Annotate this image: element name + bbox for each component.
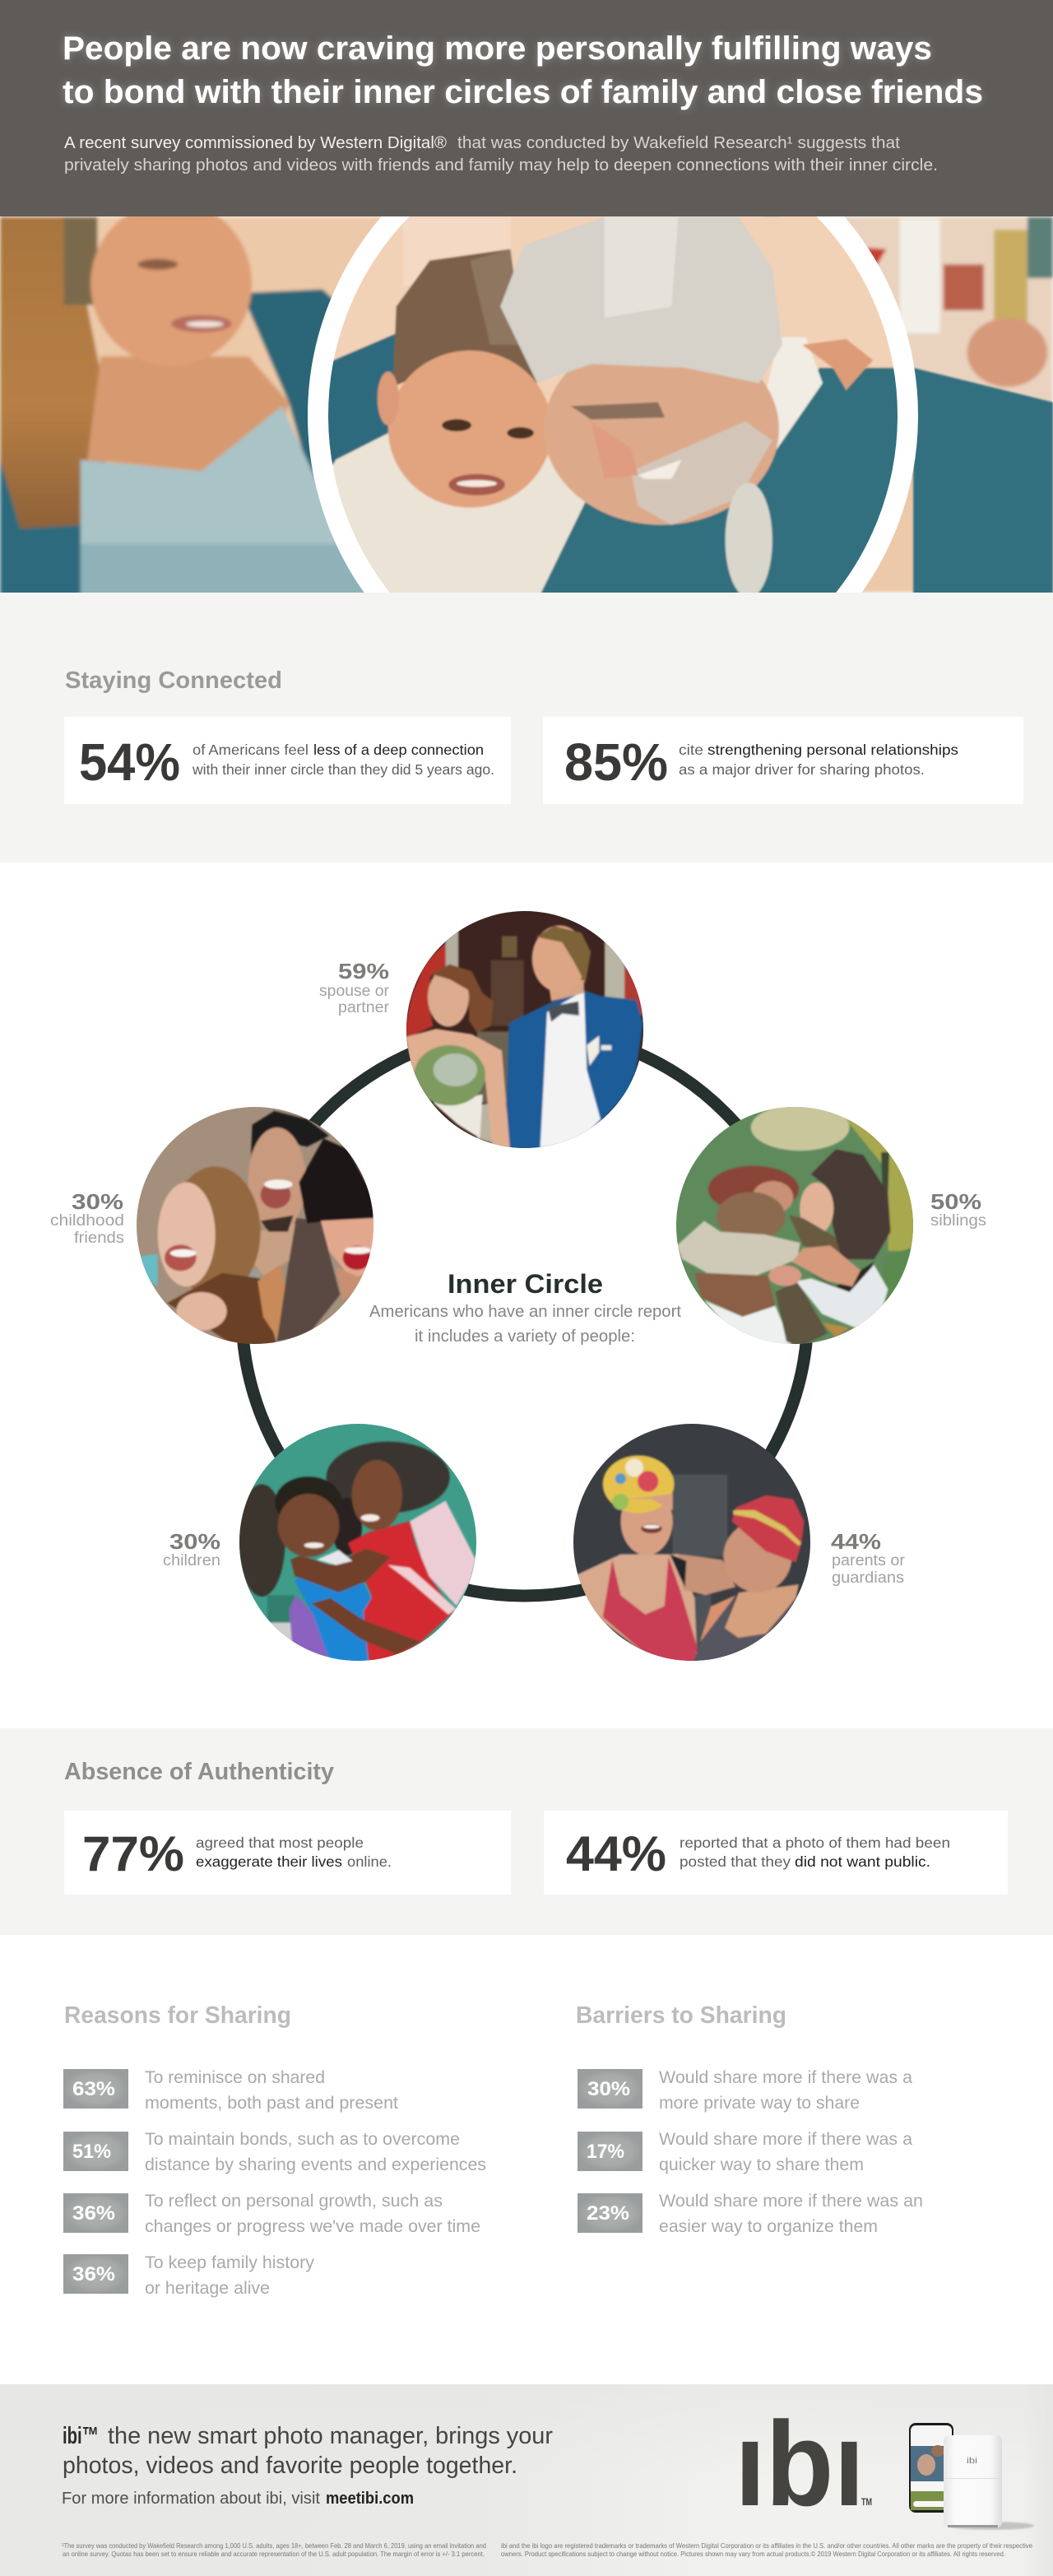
card: 77% (64, 1811, 511, 1895)
title: People are now craving more personally fulfilling ways (63, 30, 932, 67)
card: 54%: with their inner circle than they did 5 years ago. (192, 761, 494, 778)
label: children: 30% (169, 1529, 220, 1554)
label: childhood friends (50, 1189, 124, 1247)
call to action: meetibi.com (326, 2490, 414, 2508)
label: siblings: siblings (930, 1212, 986, 1230)
photo: parents in swim caps (573, 1423, 811, 1664)
label: parents or guardians: guardians (832, 1569, 904, 1587)
footer panel (0, 2384, 1053, 2576)
boy (332, 432, 586, 593)
label: parents or guardians: parents or (832, 1552, 906, 1569)
label: spouse or partner: partner (338, 999, 390, 1016)
label: siblings: 50% (930, 1189, 981, 1214)
inner ring content (332, 216, 898, 593)
photo: siblings hugging (675, 1104, 918, 1347)
item: 36% growth: changes or progress we've made over time (145, 2217, 480, 2236)
tagline: the new smart photo manager, brings your (108, 2423, 553, 2449)
title: to bond with their inner circles of family and close friends (63, 74, 983, 110)
logo: ibi: ıbı (735, 2397, 865, 2531)
card: 54%: less of a deep connection (313, 742, 484, 758)
photo: children hugging (239, 1423, 477, 1664)
intro text: that was conducted by Wakefield Research¹ suggests that (457, 133, 900, 152)
card: 54% (64, 717, 511, 804)
section: absence of authenticity (0, 1728, 1053, 1935)
center text: inner circle: it includes a variety of people: (415, 1328, 635, 1346)
photo: bride and groom (403, 910, 644, 1150)
label: siblings (930, 1189, 986, 1230)
item: 23% (578, 2192, 923, 2236)
card: 85%: as a major driver for sharing photos. (679, 761, 925, 778)
item: 17%: Would share more if there was a (659, 2130, 912, 2149)
intro text (64, 133, 938, 174)
product: ibi device (944, 2435, 1034, 2530)
item: 63%: To reminisce on shared (145, 2068, 325, 2087)
item: 36% growth: To reflect on personal growth, such as (145, 2192, 443, 2211)
card: 54%: 54% (79, 732, 180, 792)
footnote: an online survey. Quotas has been set to ensure reliable and accurate representation of the U.S. adult population. The margin of error is +/- 3.1 percent. (63, 2550, 485, 2558)
card: 54%: of Americans feel (193, 742, 308, 758)
item: 51%: 51% (72, 2141, 111, 2163)
card: 77%: agreed that most people (196, 1834, 364, 1851)
card: 44%: reported that a photo of them had been (680, 1834, 950, 1851)
item: 36% growth: 36% (72, 2202, 115, 2225)
card: 85%: 85% (564, 732, 668, 792)
item: 36% heritage (63, 2253, 314, 2298)
center text: inner circle: Inner Circle (448, 1269, 603, 1299)
item: 36% heritage: To keep family history (145, 2253, 314, 2272)
item: 51% (63, 2130, 486, 2174)
item: 30%: 30% (587, 2078, 630, 2100)
product: phone showing ibi app (909, 2423, 953, 2513)
footnote (62, 2541, 1032, 2558)
background right side (763, 216, 1053, 408)
card: 77%: exaggerate their lives (196, 1853, 342, 1870)
item: 17%: 17% (587, 2141, 624, 2163)
item: 23%: Would share more if there was an (659, 2192, 923, 2211)
intro text: privately sharing photos and videos with friends and family may help to deepen connections with their inner circle. (64, 156, 938, 174)
call to action: For more information about ibi, visit (62, 2490, 320, 2508)
mother (0, 216, 364, 593)
title (63, 30, 983, 110)
card: 85%: cite (679, 742, 703, 758)
item: 30%: Would share more if there was a (659, 2068, 912, 2087)
heading: staying connected: Staying Connected (65, 667, 282, 694)
label: children: children (163, 1552, 220, 1569)
inner circle diagram (50, 910, 986, 1664)
label: childhood friends: 30% (72, 1189, 123, 1214)
card: 44%: posted that they (680, 1853, 791, 1870)
tagline: ibi™ (63, 2423, 99, 2449)
label: spouse or partner: spouse or (319, 983, 390, 1000)
card: 77%: 77% (82, 1826, 184, 1881)
item: 51%: distance by sharing events and experiences (145, 2155, 486, 2174)
label: childhood friends: childhood (50, 1212, 124, 1230)
label: parents or guardians (831, 1529, 906, 1587)
card: 44% (544, 1811, 1008, 1895)
card: 85%: strengthening personal relationships (707, 742, 958, 758)
item: 63%: 63% (72, 2078, 115, 2100)
card: 77%: online. (347, 1853, 392, 1870)
heading: absence of authenticity: Absence of Authenticity (64, 1759, 334, 1785)
tagline (63, 2423, 553, 2479)
ring connecting the photos (242, 1030, 808, 1596)
item: 23%: 23% (587, 2202, 629, 2225)
center text: inner circle (369, 1269, 681, 1346)
grandfather (540, 366, 898, 593)
center text: inner circle: Americans who have an inner circle report (369, 1303, 681, 1321)
item: 30% (578, 2068, 912, 2113)
item: 17%: quicker way to share them (659, 2155, 864, 2174)
hero photo: mother, boy and grandfather inside white ring (0, 216, 1053, 593)
hand and right shoulder (802, 339, 1053, 601)
heading: barriers to sharing: Barriers to Sharing (576, 2002, 786, 2029)
item: 36% heritage: or heritage alive (145, 2279, 270, 2298)
tagline: photos, videos and favorite people together. (63, 2453, 517, 2479)
item: 63% (63, 2068, 398, 2113)
section: staying connected (0, 593, 1053, 863)
card: 85% (543, 717, 1023, 804)
item: 17% (578, 2130, 912, 2174)
heading: reasons for sharing: Reasons for Sharing (64, 2002, 291, 2029)
label: parents or guardians: 44% (831, 1529, 881, 1554)
label: childhood friends: friends (74, 1230, 124, 1247)
item: 36% heritage: 36% (72, 2263, 115, 2285)
panel: barriers to sharing (576, 2002, 923, 2236)
product: ibi device: ibi (967, 2457, 977, 2466)
intro text: A recent survey commissioned by Western Digital® (64, 133, 447, 152)
footnote: owners. Product specifications subject to change without notice. Pictures shown may vary from actual products.© 2019 Western Digital Corporation or its affiliates. All rights reserved. (501, 2550, 1005, 2558)
item: 36% growth (63, 2192, 480, 2236)
photo: childhood friends laughing (136, 1106, 374, 1347)
header band (0, 0, 1053, 216)
white ring (308, 216, 918, 593)
item: 63%: moments, both past and present (145, 2094, 398, 2113)
item: 51%: To maintain bonds, such as to overcome (145, 2130, 460, 2149)
logo: ibi: TM (861, 2496, 872, 2508)
label: spouse or partner (319, 959, 390, 1016)
label: children (163, 1529, 220, 1569)
panel: reasons for sharing (63, 2002, 486, 2298)
footnote: ¹The survey was conducted by Wakefield Research among 1,000 U.S. adults, ages 18+, between Feb. 28 and March 6, 2019, using an email invitation and (62, 2541, 486, 2550)
item: 23%: easier way to organize them (659, 2217, 878, 2236)
item: 30%: more private way to share (659, 2094, 860, 2113)
card: 44%: did not want public. (795, 1853, 930, 1870)
label: spouse or partner: 59% (338, 959, 389, 983)
card: 44%: 44% (566, 1826, 666, 1881)
